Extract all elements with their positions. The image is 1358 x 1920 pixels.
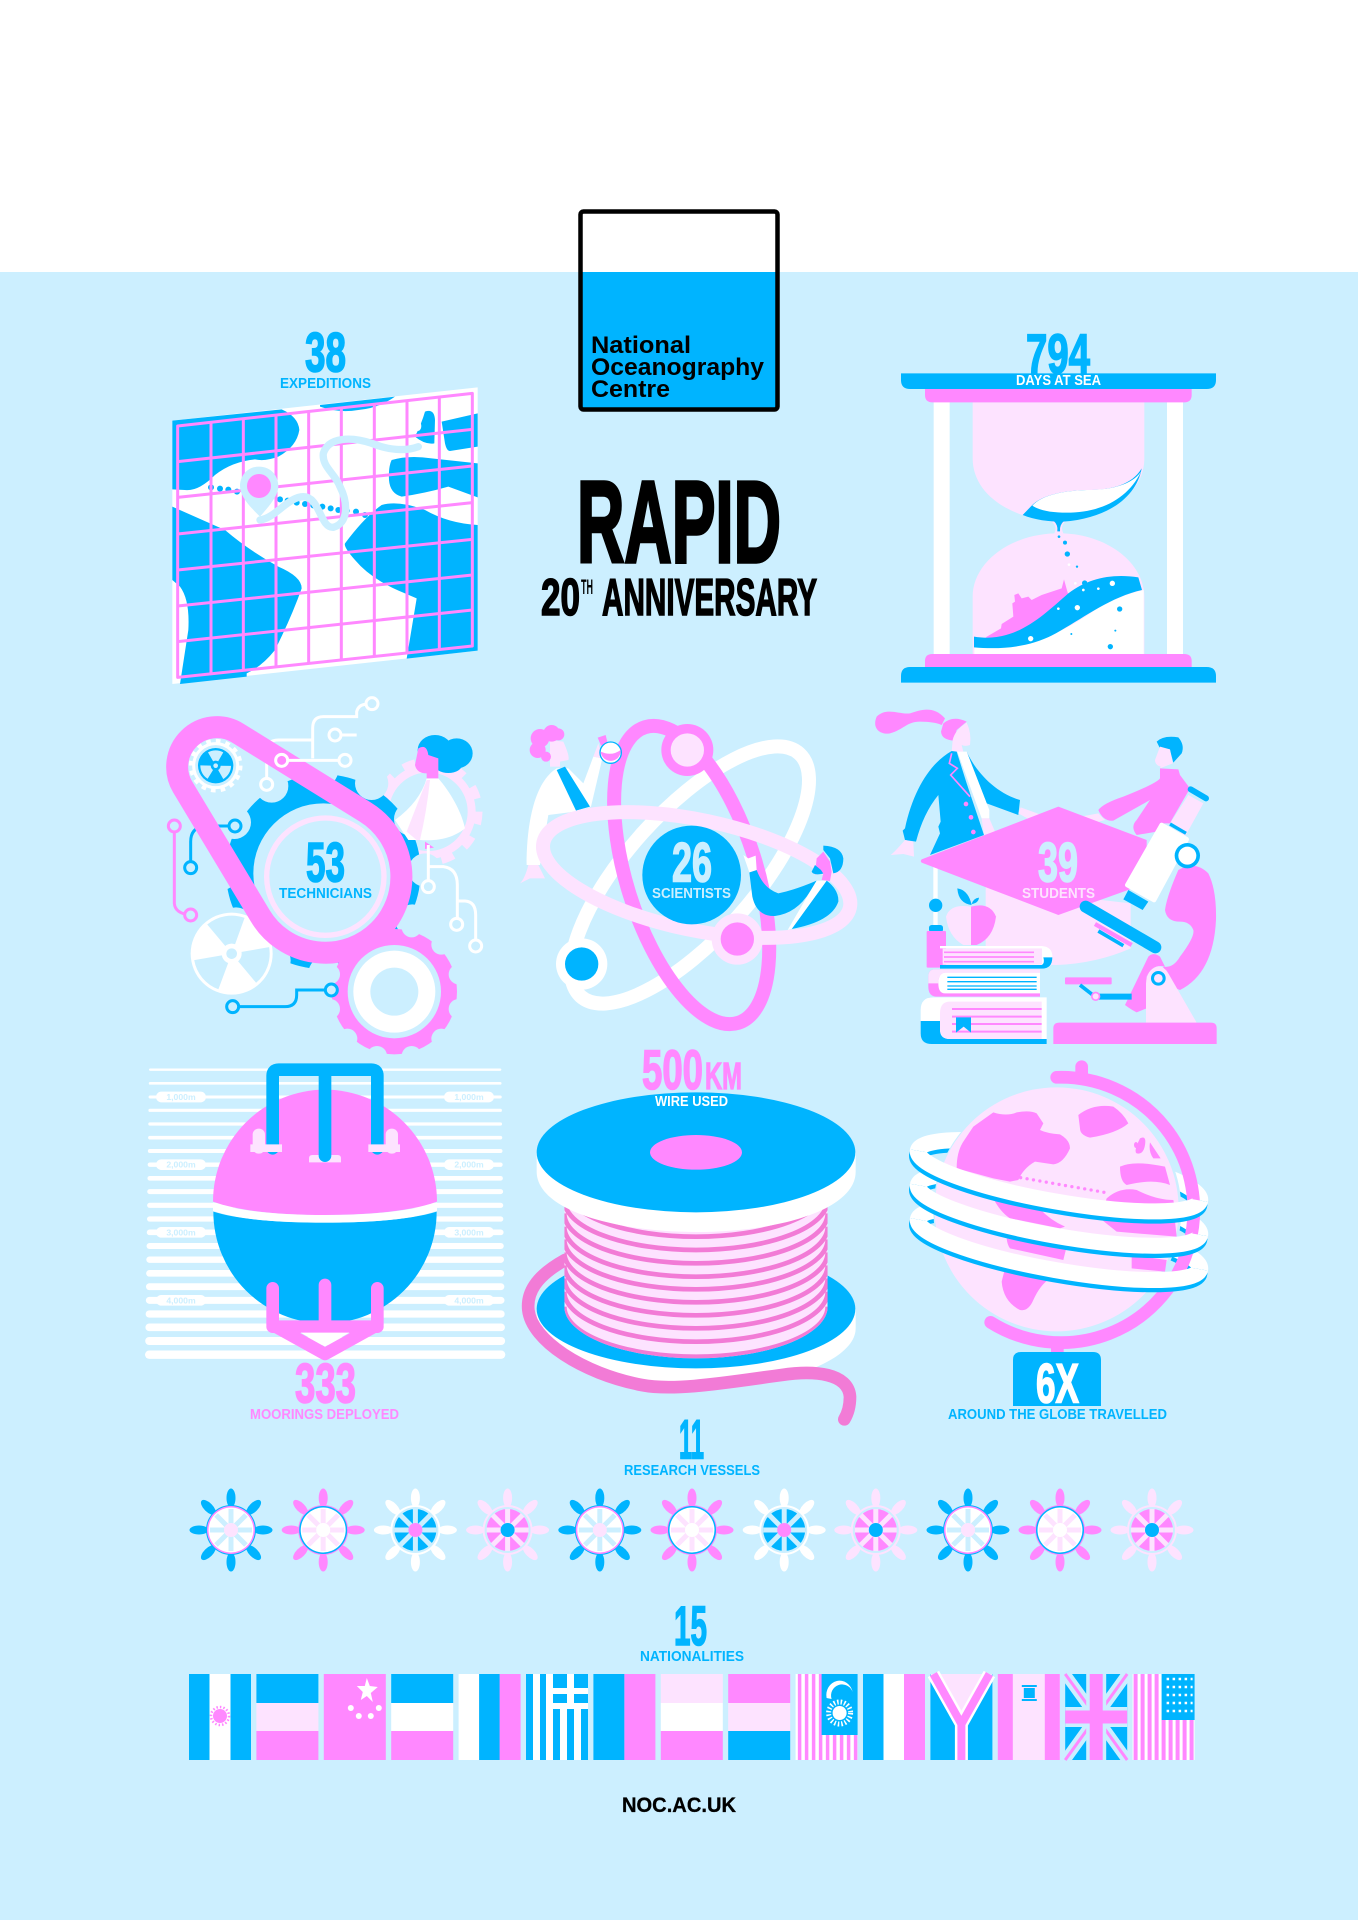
depth labels: 1,000m (166, 1092, 196, 1102)
depth labels: 4,000m (454, 1295, 484, 1305)
stat: 38 expeditions: EXPEDITIONS (280, 376, 371, 392)
loose wire (528, 1260, 850, 1419)
panel: scientists (520, 708, 861, 1042)
nucleus (642, 826, 741, 924)
gears and circuit illustration (168, 698, 482, 1066)
bottom anchor (273, 1285, 377, 1354)
stat: 333 moorings deployed (250, 1352, 399, 1423)
stat: 11 research vessels: RESEARCH VESSELS (624, 1463, 760, 1479)
panel: technicians (168, 698, 482, 1066)
apple (946, 888, 996, 945)
flag 1 (189, 1674, 251, 1760)
hourglass (901, 373, 1216, 683)
logo: Oceanography (591, 354, 765, 381)
panel: days at sea (901, 322, 1216, 683)
circuit lines (174, 704, 476, 1007)
depth labels: 3,000m (454, 1227, 484, 1237)
atom particles (556, 724, 763, 990)
flags row (189, 1674, 1195, 1760)
label: days at sea: DAYS AT SEA (1016, 373, 1101, 389)
stat: 39 students (1022, 830, 1095, 902)
pink loop chain (177, 727, 401, 953)
depth labels (156, 1092, 494, 1306)
female scientist (520, 725, 602, 883)
label: around the globe travelled: AROUND THE GLOBE TRAVELLED (948, 1407, 1167, 1423)
icon: radiation disc (191, 913, 273, 995)
orbits (532, 708, 861, 1042)
globe illustration (913, 1067, 1205, 1355)
ship wheels row (190, 1488, 1194, 1572)
panel: moorings (149, 1070, 501, 1423)
logo: National (591, 332, 691, 359)
title: 20 (541, 569, 580, 627)
stat number 500km: KM (705, 1056, 742, 1098)
stat: 53 technicians: TECHNICIANS (279, 886, 372, 902)
panel: globe (913, 1067, 1205, 1423)
depth labels: 2,000m (454, 1160, 484, 1170)
stat: 38 expeditions: 38 (305, 320, 346, 384)
students illustration (875, 710, 1217, 1044)
front of rings (913, 1151, 1200, 1299)
stat: 15 nationalities (640, 1594, 744, 1665)
flag 11 (863, 1674, 925, 1760)
stat: 6x: 6X (1036, 1352, 1079, 1414)
atom illustration (520, 708, 861, 1042)
depth labels: 2,000m (166, 1160, 196, 1170)
stat: 39 students: STUDENTS (1022, 886, 1095, 902)
pale gear behind woman (378, 762, 478, 862)
stat: 11 research vessels (624, 1408, 760, 1479)
woman student (875, 710, 1042, 857)
logo (580, 212, 778, 410)
flag 4 (391, 1674, 453, 1760)
route and waypoints (208, 484, 368, 518)
stat: 53 technicians (279, 830, 372, 902)
stat: 53 technicians: 53 (306, 830, 345, 894)
graduation cap (921, 807, 1147, 915)
book stack (921, 946, 1052, 1044)
man student (1081, 737, 1190, 835)
male scientist (743, 846, 843, 930)
wire spool (528, 1092, 856, 1419)
depth labels: 1,000m (454, 1092, 484, 1102)
icon: small gear (191, 741, 241, 791)
top frame (273, 1070, 377, 1156)
stat: 26 scientists: 26 (672, 830, 712, 894)
flag 10 (796, 1674, 858, 1760)
graduation cord (927, 860, 946, 968)
big blue gear (205, 753, 442, 990)
panel: students (875, 710, 1217, 1044)
wound wire (564, 1207, 828, 1358)
depth labels: 3,000m (166, 1227, 196, 1237)
title: ANNIVERSARY (602, 569, 817, 627)
stat: 333 moorings deployed: 333 (295, 1352, 356, 1414)
label: wire used: WIRE USED (655, 1094, 728, 1110)
flag 2 (256, 1674, 318, 1760)
stat: 26 scientists (652, 830, 731, 902)
flag 8 (661, 1674, 723, 1760)
stat: 15 nationalities: NATIONALITIES (640, 1649, 744, 1665)
sphere (213, 1090, 437, 1323)
mooring float illustration (149, 1070, 501, 1355)
stat: 333 moorings deployed: MOORINGS DEPLOYED (250, 1407, 399, 1423)
flag 7 (593, 1674, 655, 1760)
microscope (1053, 789, 1217, 1044)
title: TH (581, 576, 593, 599)
back of rings (917, 1125, 1205, 1273)
pink gear (320, 917, 469, 1066)
logo: Centre (591, 376, 670, 403)
flag 14 (1065, 1674, 1127, 1760)
flag 9 (728, 1674, 790, 1760)
stat: 38 expeditions (280, 320, 371, 392)
stat: 26 scientists: SCIENTISTS (652, 886, 731, 902)
icon: location pin (240, 467, 278, 517)
flag 5 (459, 1674, 521, 1760)
top flange (537, 1092, 856, 1232)
flag 6 (526, 1674, 588, 1760)
panel: nationalities (189, 1594, 1195, 1760)
stat: 15 nationalities: 15 (674, 1594, 707, 1657)
stat: 39 students: 39 (1038, 830, 1078, 894)
flag 3 (324, 1674, 386, 1760)
title: RAPID (577, 457, 781, 587)
flag 15 (1133, 1674, 1195, 1760)
map illustration (172, 387, 478, 684)
stat: 11 research vessels: 11 (679, 1408, 704, 1470)
globe arm (991, 1067, 1194, 1343)
depth lines (149, 1070, 501, 1355)
stat number 794: 794 (1026, 322, 1090, 385)
title (541, 457, 817, 627)
continents (957, 1106, 1177, 1310)
pale brackets (253, 1129, 398, 1162)
footer url: NOC.AC.UK (622, 1794, 736, 1817)
flag 13 (998, 1674, 1060, 1760)
woman technician (395, 735, 473, 849)
flask (598, 735, 621, 763)
panel: expeditions (172, 320, 478, 684)
panel: wire used (528, 1038, 856, 1419)
panel: research vessels (190, 1408, 1194, 1572)
flag 12 (930, 1674, 992, 1760)
stat number 500km: 500 (642, 1038, 703, 1101)
depth labels: 4,000m (166, 1295, 196, 1305)
circuit nodes (168, 698, 482, 1013)
map grid (178, 393, 472, 677)
